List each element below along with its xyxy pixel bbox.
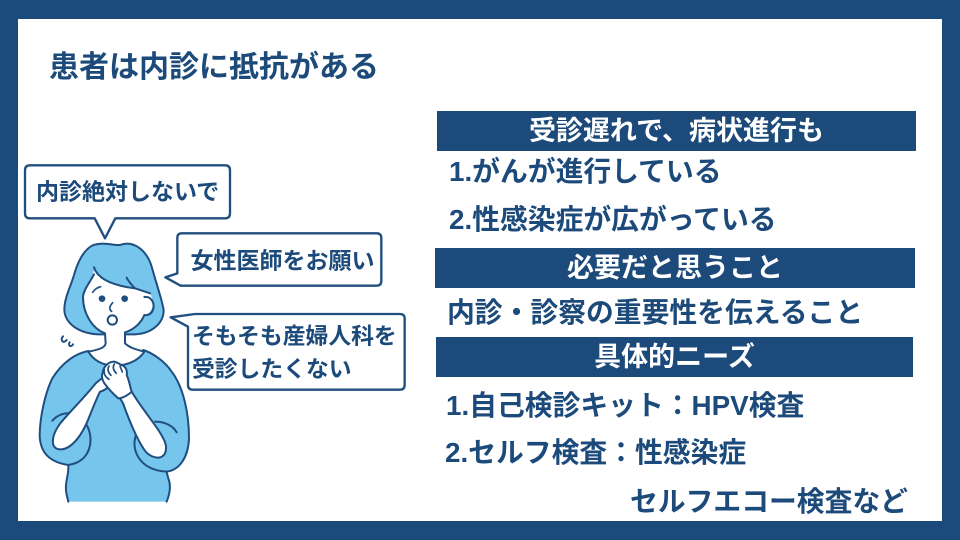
eyebrow, eyes, nose, mouth [93, 287, 113, 311]
speech bubble: middle [165, 233, 381, 286]
left arm [53, 378, 108, 449]
heading bar: specific needs: 具体的ニーズ [594, 342, 755, 372]
hair [64, 244, 164, 334]
sleeve folds [52, 413, 177, 472]
sweat marks [62, 336, 73, 346]
speech bubble: top [25, 165, 230, 238]
bubble text: bottom: そもそも産婦人科を [192, 323, 397, 349]
heading bar: specific needs [436, 337, 913, 377]
bubble text: top: 内診絶対しないで [36, 178, 219, 204]
text: item 1: 1.がんが進行している [449, 156, 722, 187]
bubble text: bottom second line: 受診したくない [192, 356, 352, 382]
hands [102, 362, 132, 398]
right arm [115, 392, 166, 458]
text: item 2: 2.性感染症が広がっている [449, 204, 777, 235]
text: importance: 内診・診察の重要性を伝えること [447, 297, 863, 328]
title: 患者は内診に抵抗がある [49, 51, 379, 84]
text: need 2 continued: セルフエコー検査など [630, 486, 908, 517]
bubble text: middle: 女性医師をお願い [190, 248, 374, 274]
body [40, 350, 189, 502]
arms and hands [52, 362, 177, 472]
heading bar: delayed visits [437, 111, 916, 151]
text: need 1: 1.自己検診キット：HPV検査 [446, 390, 804, 421]
head [62, 244, 164, 366]
text: need 2: 2.セルフ検査：性感染症 [445, 437, 746, 468]
heading bar: what is necessary [435, 248, 915, 288]
speech bubble: bottom [171, 314, 405, 390]
heading bar: delayed visits: 受診遅れで、病状進行も [529, 116, 824, 146]
icon: woman [40, 244, 189, 502]
heading bar: what is necessary: 必要だと思うこと [567, 253, 783, 283]
face and neck [83, 270, 153, 366]
